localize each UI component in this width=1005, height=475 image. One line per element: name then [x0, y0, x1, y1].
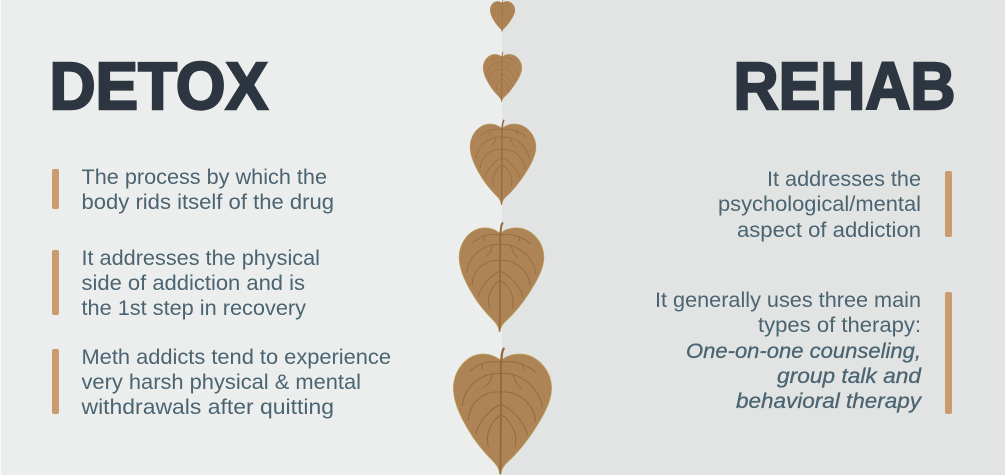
- leaf 2: [483, 52, 522, 102]
- leaf 5: [453, 349, 552, 475]
- rehab item 2: types of therapy:: [758, 313, 921, 337]
- detox item 3: withdrawals after quitting: [80, 395, 334, 419]
- heading: rehab: REHAB: [734, 49, 956, 124]
- leaf 3: [470, 120, 536, 205]
- rehab item 2: group talk and: [777, 364, 922, 388]
- detox item 3: Meth addicts tend to experience: [82, 345, 391, 369]
- detox item 2: side of addiction and is: [82, 271, 305, 295]
- heading: detox: DETOX: [50, 49, 268, 124]
- detox item 2: It addresses the physical: [82, 246, 320, 270]
- leaf 4: [459, 223, 544, 332]
- leaf column: [453, 0, 552, 475]
- rehab item 1: psychological/mental: [718, 192, 921, 216]
- detox item 3: [52, 345, 391, 419]
- detox item 2: [52, 246, 320, 320]
- rehab item 2: behavioral therapy: [736, 389, 922, 413]
- detox item 1: [52, 165, 334, 214]
- detox item 3: very harsh physical & mental: [82, 370, 361, 394]
- rehab item 1: [718, 167, 952, 242]
- detox item 1: The process by which the: [82, 165, 327, 189]
- rehab item 2: It generally uses three main: [655, 288, 921, 312]
- rehab item 1: It addresses the: [767, 167, 921, 191]
- rehab item 1: aspect of addiction: [737, 218, 921, 242]
- detox item 2: the 1st step in recovery: [82, 296, 306, 320]
- leaf 1: [490, 0, 515, 32]
- rehab item 2: One-on-one counseling,: [686, 339, 921, 363]
- detox item 1: body rids itself of the drug: [82, 190, 334, 214]
- rehab item 2: [655, 288, 952, 414]
